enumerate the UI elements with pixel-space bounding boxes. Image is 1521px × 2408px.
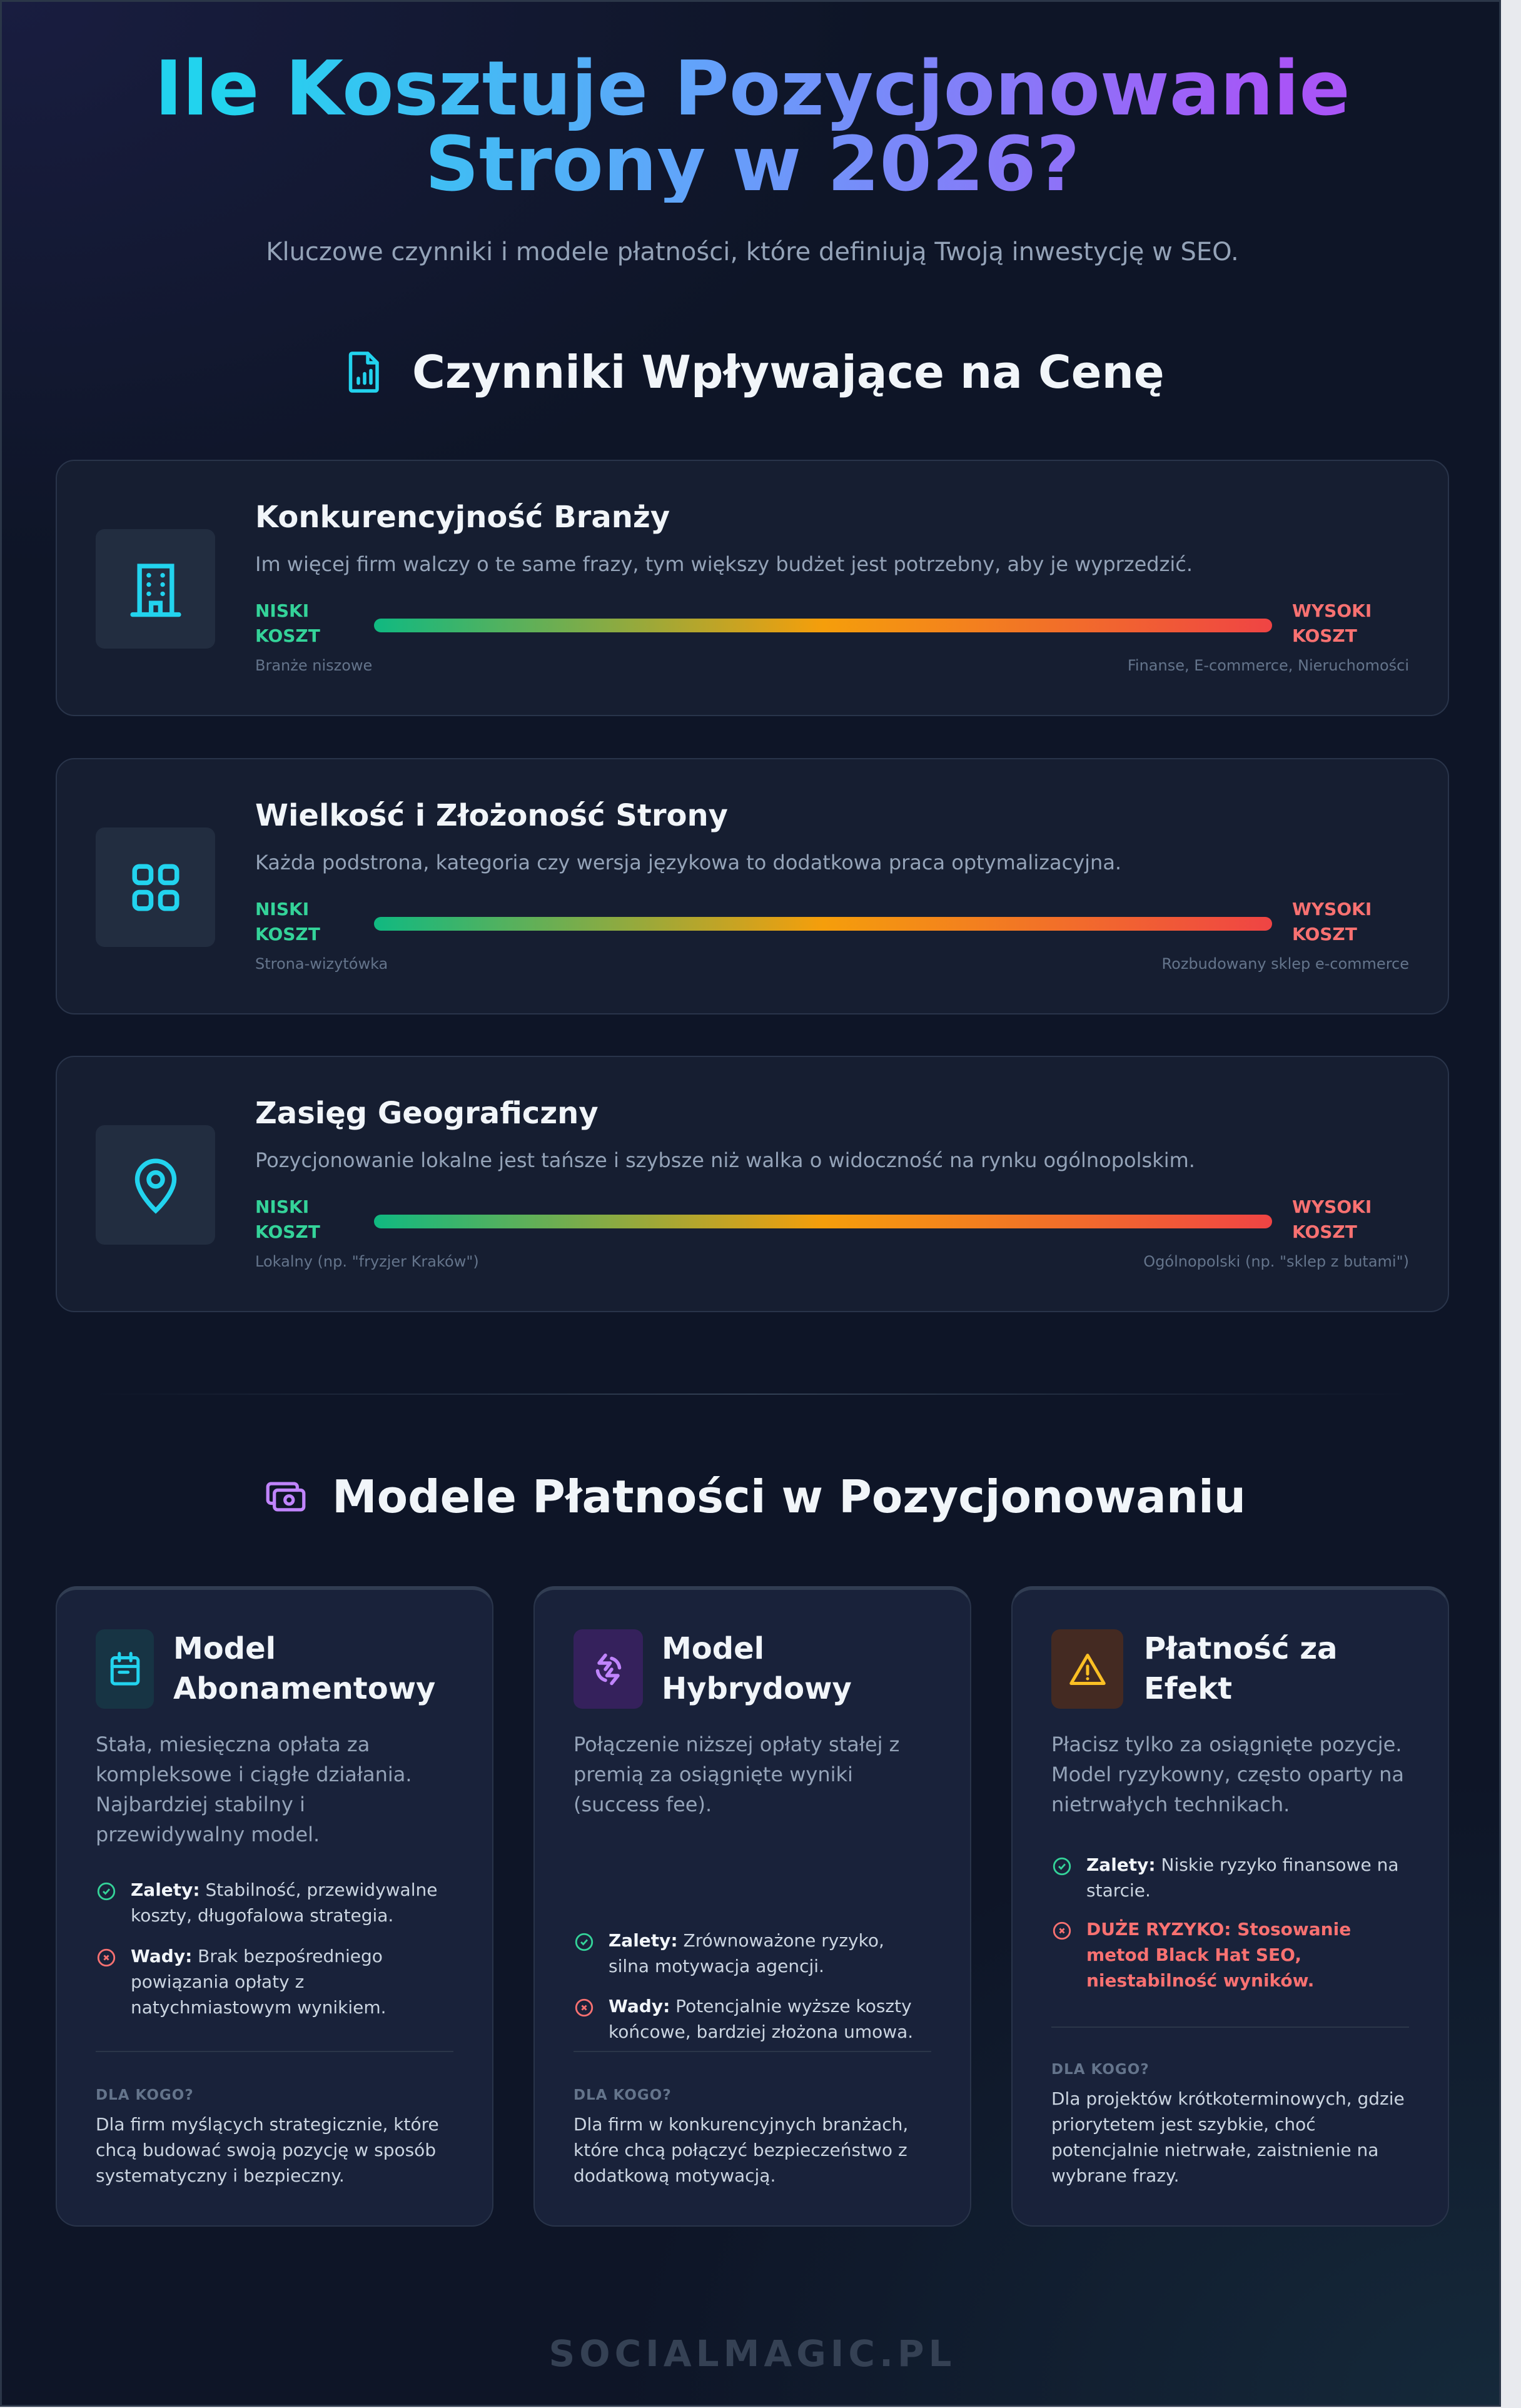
cost bar [374, 1215, 1272, 1228]
factor description: Im więcej firm walczy o te same frazy, tym większy budżet jest potrzebny, aby je wyprzedzić. [255, 552, 1193, 576]
high example: Ogólnopolski (np. "sklep z butami") [1143, 1253, 1409, 1270]
model description: Płacisz tylko za osiągnięte pozycje. Model ryzykowny, często oparty na nietrwałych technikach. [1051, 1733, 1404, 1816]
low cost label [255, 1196, 320, 1242]
high cost label: KOSZT [1292, 924, 1357, 944]
cost bar [374, 917, 1272, 931]
high cost label: WYSOKI [1292, 600, 1372, 621]
model description: Stała, miesięczna opłata za kompleksowe i ciągłe działania. Najbardziej stabilny i przewidywalny model. [96, 1733, 412, 1846]
for whom label: DLA KOGO? [574, 2087, 672, 2103]
for whom text: Dla firm w konkurencyjnych branżach, które chcą połączyć bezpieczeństwo z dodatkową motywacją. [574, 2114, 908, 2186]
high cost label [1292, 1196, 1372, 1242]
low cost label: KOSZT [255, 625, 320, 646]
model title: Płatność za [1144, 1631, 1338, 1666]
panel: competitiveness [56, 460, 1449, 716]
low cost label: KOSZT [255, 1222, 320, 1242]
high example: Rozbudowany sklep e-commerce [1162, 955, 1409, 973]
low cost label: NISKI [255, 899, 309, 919]
panel: subscription model [56, 1586, 493, 2227]
icon: hybrid arrows [574, 1629, 643, 1709]
low cost label: KOSZT [255, 924, 320, 944]
factor description: Pozycjonowanie lokalne jest tańsze i szybsze niż walka o widoczność na rynku ogólnopolskim. [255, 1148, 1195, 1172]
for whom text: Dla firm myślących strategicznie, które chcą budować swoją pozycję w sposób systematyczny i bezpieczny. [96, 2114, 439, 2186]
low cost label [255, 600, 320, 646]
model title: Hybrydowy [662, 1671, 852, 1706]
cons: Wady: Potencjalnie wyższe koszty końcowe, bardziej złożona umowa. [609, 1996, 913, 2042]
subtitle: Kluczowe czynniki i modele płatności, które definiują Twoją inwestycję w SEO. [266, 238, 1239, 266]
high cost label: WYSOKI [1292, 1196, 1372, 1217]
pros: Zalety: Niskie ryzyko finansowe na starcie. [1086, 1854, 1398, 1901]
model title [662, 1631, 852, 1706]
for whom label: DLA KOGO? [1051, 2061, 1150, 2078]
high risk: DUŻE RYZYKO: Stosowanie metod Black Hat SEO, niestabilność wyników. [1086, 1919, 1351, 1991]
icon: money [266, 1482, 305, 1511]
low example: Branże niszowe [255, 657, 372, 674]
icon: grid [96, 827, 215, 947]
model title: Efekt [1144, 1671, 1232, 1706]
high cost label: KOSZT [1292, 1222, 1357, 1242]
footer brand: SOCIALMAGIC.PL [549, 2332, 956, 2375]
model title: Model [173, 1631, 276, 1666]
factor title: Wielkość i Złożoność Strony [255, 798, 728, 833]
low example: Strona-wizytówka [255, 955, 388, 973]
heading: payment models: Modele Płatności w Pozycjonowaniu [332, 1470, 1246, 1523]
icon: building [96, 529, 215, 649]
panel: geography [56, 1056, 1449, 1312]
high cost label [1292, 600, 1372, 646]
cons: Wady: Brak bezpośredniego powiązania opłaty z natychmiastowym wynikiem. [131, 1946, 387, 2018]
high cost label [1292, 899, 1372, 944]
low cost label: NISKI [255, 600, 309, 621]
high cost label: WYSOKI [1292, 899, 1372, 919]
icon: warning [1051, 1629, 1123, 1709]
factor title: Zasięg Geograficzny [255, 1096, 599, 1131]
panel: size [56, 758, 1449, 1014]
factor title: Konkurencyjność Branży [255, 500, 670, 535]
icon: calendar [96, 1629, 154, 1709]
model description: Połączenie niższej opłaty stałej z premią za osiągnięte wyniki (success fee). [574, 1733, 899, 1816]
pros: Zalety: Zrównoważone ryzyko, silna motywacja agencji. [609, 1930, 884, 1976]
cost bar [374, 619, 1272, 632]
model title: Abonamentowy [173, 1671, 435, 1706]
model title [1144, 1631, 1338, 1706]
low cost label: NISKI [255, 1196, 309, 1217]
title: Strony w 2026? [425, 121, 1080, 208]
heading: factors: Czynniki Wpływające na Cenę [412, 346, 1165, 398]
model title: Model [662, 1631, 764, 1666]
high example: Finanse, E-commerce, Nieruchomości [1128, 657, 1409, 674]
for whom label: DLA KOGO? [96, 2087, 194, 2103]
low cost label [255, 899, 320, 944]
title: Ile Kosztuje Pozycjonowanie [154, 46, 1350, 133]
title [2, 51, 1503, 203]
low example: Lokalny (np. "fryzjer Kraków") [255, 1253, 479, 1270]
panel: pay for results [1011, 1586, 1449, 2227]
pros: Zalety: Stabilność, przewidywalne koszty, długofalowa strategia. [131, 1879, 437, 1926]
for whom text: Dla projektów krótkoterminowych, gdzie priorytetem jest szybkie, choć potencjalnie nietrwałe, zaistnienie na wybrane frazy. [1051, 2088, 1405, 2186]
panel: hybrid model [533, 1586, 971, 2227]
icon: map pin [96, 1125, 215, 1245]
factor description: Każda podstrona, kategoria czy wersja językowa to dodatkowa praca optymalizacyjna. [255, 851, 1121, 874]
model title [173, 1631, 435, 1706]
icon: document chart [349, 352, 379, 393]
high cost label: KOSZT [1292, 625, 1357, 646]
